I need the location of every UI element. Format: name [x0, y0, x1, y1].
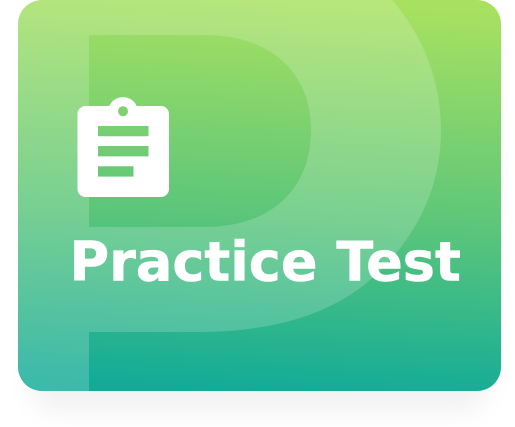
- watermark letter P: [0, 0, 441, 391]
- title: Practice Test: [70, 230, 461, 294]
- icon: clipboard: [78, 97, 169, 197]
- card shadow: [32, 30, 487, 412]
